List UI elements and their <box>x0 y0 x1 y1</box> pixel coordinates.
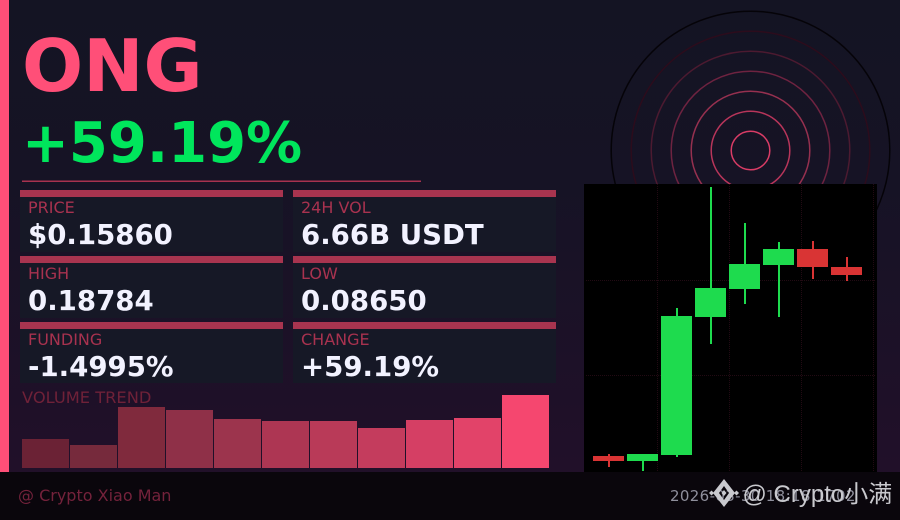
card: low <box>293 256 556 318</box>
card: 24h volume: 6.66B USDT <box>301 218 484 251</box>
card: change <box>293 322 556 383</box>
card: funding <box>20 322 283 383</box>
card: low: 0.08650 <box>301 284 427 317</box>
title: ONG <box>22 24 203 108</box>
accent bar <box>0 0 9 472</box>
card: 24h volume: 24H VOL <box>301 198 371 217</box>
candlestick chart <box>584 184 877 472</box>
watermark icon <box>709 479 739 507</box>
card: high: HIGH <box>28 264 69 283</box>
footer credit: @ Crypto Xiao Man <box>18 486 171 505</box>
change headline: +59.19% <box>22 111 302 176</box>
volume trend label: VOLUME TREND <box>22 388 151 407</box>
card: low: LOW <box>301 264 338 283</box>
card: high <box>20 256 283 318</box>
card: price: PRICE <box>28 198 75 217</box>
card: funding: FUNDING <box>28 330 102 349</box>
footer bar <box>0 472 900 520</box>
headline rule <box>22 180 421 182</box>
card: high: 0.18784 <box>28 284 154 317</box>
card: price <box>20 190 283 252</box>
card: funding: -1.4995% <box>28 350 174 383</box>
card: change: +59.19% <box>301 350 439 383</box>
concentric circles <box>611 11 890 290</box>
footer timestamp: 2026-03-30 18:18:1702 <box>670 487 856 505</box>
card: change: CHANGE <box>301 330 370 349</box>
watermark text: @ Crypto小满 <box>742 481 892 508</box>
volume bar chart <box>22 395 549 468</box>
card: price: $0.15860 <box>28 218 173 251</box>
card: 24h volume <box>293 190 556 252</box>
